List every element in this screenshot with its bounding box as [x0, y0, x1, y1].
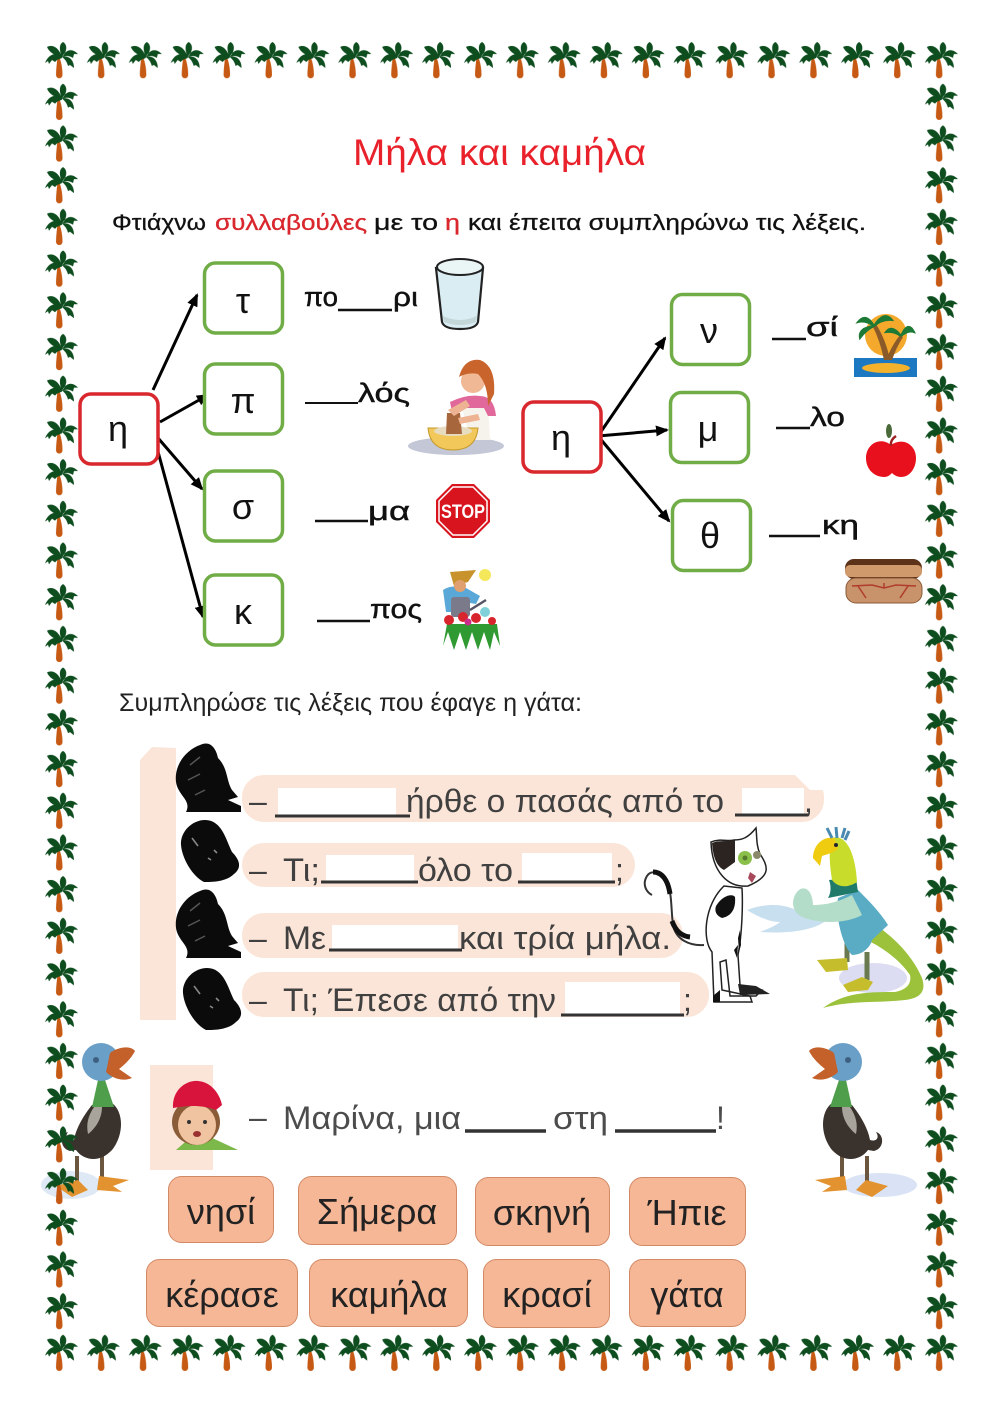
icon: silhouettes: [176, 743, 241, 1030]
box: η right: [523, 402, 601, 472]
word: πηλός: [305, 378, 410, 408]
dialogue line 2: Τι;: [283, 852, 320, 888]
box: π: π: [231, 380, 255, 421]
dialogue line 5: στη: [553, 1100, 608, 1136]
word: γάτα: [630, 1260, 746, 1326]
box: μ: μ: [698, 408, 718, 449]
box: η right: η: [551, 417, 571, 458]
dialogue line 3: Με: [283, 920, 326, 956]
box: ν: ν: [700, 310, 718, 351]
instruction text: Φτιάχνω: [112, 210, 206, 235]
word: νησί: [772, 312, 838, 342]
box: κ: [204, 575, 282, 645]
box: τ: τ: [236, 280, 250, 321]
box: τ: [204, 263, 282, 333]
word: ποτήρι: ρι: [393, 282, 418, 312]
word: ποτήρι: πο: [304, 282, 338, 312]
box: σ: σ: [232, 486, 254, 527]
illustration: left duck: [41, 1043, 135, 1199]
word: σκηνή: [476, 1178, 610, 1246]
word: νησί: σί: [806, 312, 838, 342]
word: κήπος: πος: [370, 594, 422, 624]
icon: potter: [408, 360, 504, 455]
dialogue line 3: και τρία μήλα.: [459, 920, 671, 956]
word: κέρασε: κέρασε: [165, 1274, 279, 1315]
word: νησί: [168, 1176, 274, 1242]
arrows from left η: [153, 295, 208, 617]
box: π: [204, 364, 282, 434]
dialogue line 5: [249, 1099, 725, 1136]
dialogue line 4: Τι; Έπεσε από την: [283, 982, 556, 1018]
word: Ήπιε: [630, 1178, 746, 1246]
instruction text: η: [445, 210, 460, 235]
word: Ήπιε: Ήπιε: [646, 1192, 727, 1233]
word: σήμα: μα: [368, 496, 410, 526]
title: Μήλα και καμήλα: [353, 132, 646, 173]
dialogue panel: [140, 743, 830, 1030]
erased word patches: [278, 775, 830, 1014]
word: σήμα: [315, 496, 410, 526]
peach backdrop: [140, 747, 824, 1020]
boy dialogue: [150, 1065, 725, 1170]
icon: island: [854, 314, 917, 377]
dialogue line 3: –: [249, 920, 267, 956]
word: καμήλα: καμήλα: [330, 1274, 448, 1315]
icon: stop sign: [436, 484, 490, 538]
word: σκηνή: σκηνή: [493, 1192, 591, 1233]
instruction text: και έπειτα συμπληρώνω τις λέξεις.: [468, 210, 866, 235]
box: η left: η: [108, 408, 128, 449]
dialogue line 1: ,: [804, 783, 813, 819]
word: πηλός: λός: [358, 378, 410, 408]
dialogue line 5: –: [249, 1099, 267, 1135]
word: ποτήρι: [304, 282, 418, 312]
dialogue line 1: –: [249, 783, 267, 819]
dialogue line 5: Μαρίνα, μια: [283, 1100, 461, 1136]
box: κ: κ: [234, 591, 253, 632]
dialogue line 2: –: [249, 852, 267, 888]
word: γάτα: γάτα: [650, 1274, 724, 1315]
word: κρασί: κρασί: [502, 1274, 592, 1315]
illustration: parrot: [747, 827, 923, 1008]
icon: glasses case: [845, 559, 922, 603]
section 2 instruction: Συμπληρώσε τις λέξεις που έφαγε η γάτα:: [119, 689, 582, 717]
dialogue line 1: ήρθε ο πασάς από το: [406, 783, 724, 819]
box: ν: [672, 294, 750, 364]
word: κέρασε: [146, 1260, 298, 1326]
dialogue line 2: [249, 852, 624, 888]
dialogue line 1: [249, 783, 813, 819]
box: θ: θ: [700, 515, 720, 556]
instruction text: συλλαβούλες: [215, 210, 367, 235]
word: κρασί: [484, 1260, 610, 1328]
word: καμήλα: [310, 1260, 468, 1326]
illustration: right duck: [809, 1043, 917, 1197]
box: η left: [80, 394, 158, 464]
peach band: [150, 1065, 213, 1170]
dialogue line 2: όλο το: [418, 852, 513, 888]
icon: gardener: [443, 569, 500, 650]
word: νησί: νησί: [187, 1191, 255, 1232]
icon: apple: [866, 424, 916, 477]
word: Σήμερα: [298, 1176, 456, 1244]
dialogue line 5: !: [716, 1100, 725, 1136]
box: σ: [204, 471, 282, 541]
word: μήλο: [776, 402, 845, 432]
dialogue line 3: [249, 920, 671, 956]
word: κήπος: [317, 594, 422, 624]
instruction text: με το: [374, 210, 438, 235]
word: θήκη: [769, 510, 859, 540]
box: θ: [672, 500, 750, 570]
dialogue line 4: –: [249, 982, 267, 1018]
word: Σήμερα: Σήμερα: [317, 1191, 437, 1232]
arrows from right η: [598, 338, 669, 521]
icon: glass: [436, 259, 483, 329]
dialogue line 2: ;: [615, 852, 624, 888]
word: θήκη: κη: [822, 510, 859, 540]
diagram: left syllables: [80, 259, 504, 650]
icon: boy: [172, 1081, 238, 1150]
illustration: cat: [645, 828, 770, 1002]
dialogue line 4: [249, 982, 692, 1018]
word: μήλο: λο: [810, 402, 845, 432]
dialogue line 4: ;: [683, 982, 692, 1018]
word bank: [146, 1176, 746, 1328]
icon: stop sign: STOP: [441, 502, 485, 523]
box: μ: [670, 392, 748, 462]
diagram: right syllables: [523, 294, 922, 603]
